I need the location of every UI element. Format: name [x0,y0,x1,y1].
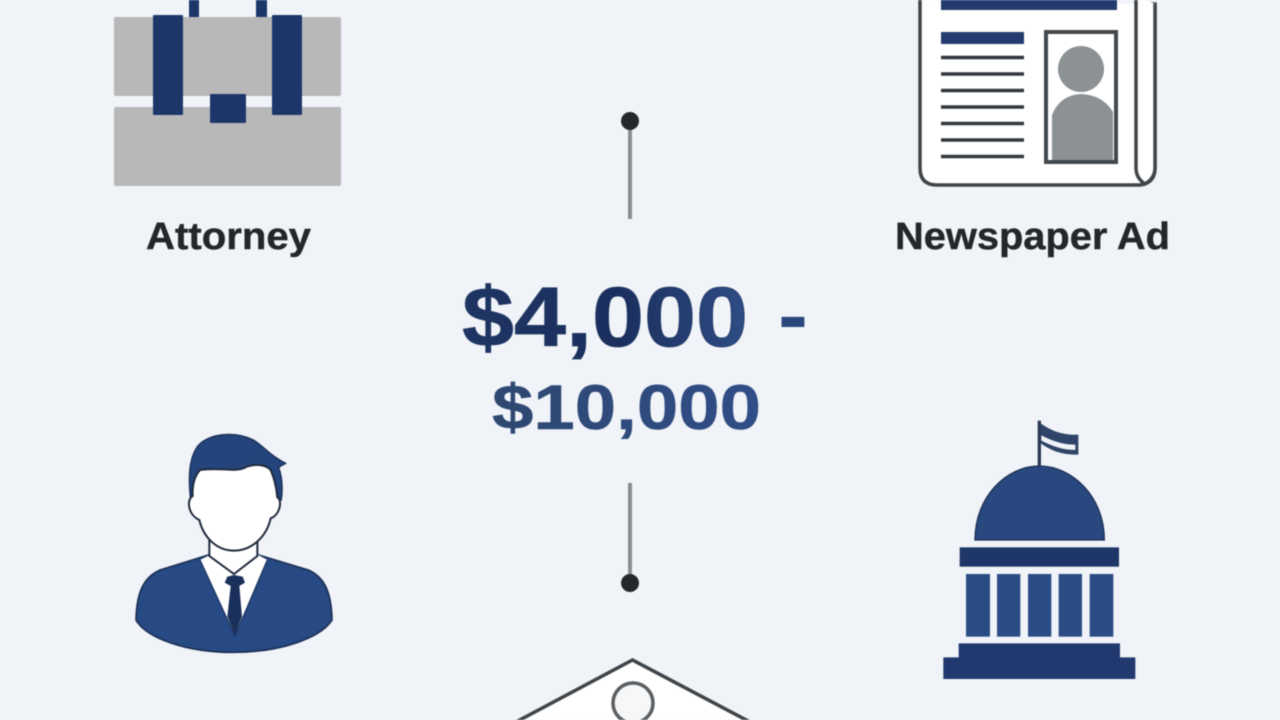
label: Newspaper Ad: Newspaper Ad [895,216,1170,258]
label: Attorney: Attorney [146,216,311,258]
price: $4,000 -: $4,000 [462,270,748,364]
price: $10,000: $10,000 [492,373,761,443]
price: $4,000 -: - [778,268,808,362]
icon: newspaper [920,0,1155,185]
connector: bottom [621,483,639,592]
icon: capitol building [943,421,1135,679]
icon: price tag [516,660,750,720]
icon: person in suit [136,434,332,652]
icon: briefcase [114,0,341,186]
connector: top [621,112,639,219]
